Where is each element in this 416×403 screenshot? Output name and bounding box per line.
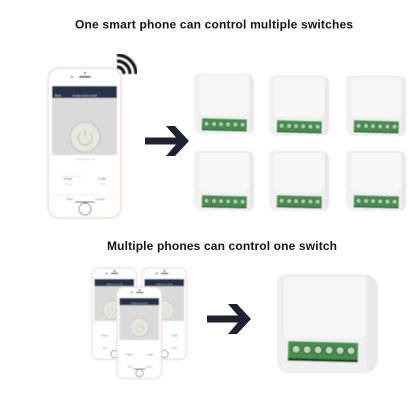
title: one phone: One smart phone can control multiple switches bbox=[75, 17, 353, 31]
phone: right: bridge smart socket bbox=[157, 283, 173, 286]
phone: center: Back bbox=[128, 367, 134, 369]
arrow: top bbox=[145, 126, 189, 156]
phones: three smartphones bbox=[92, 268, 187, 378]
phone: main smartphone: Back bbox=[67, 197, 74, 201]
phone: center: Confirm bbox=[145, 366, 153, 369]
phone: center: 0 min bbox=[147, 353, 154, 356]
phone: right: Confirm bbox=[170, 347, 178, 350]
phone: center bbox=[117, 287, 162, 378]
phone: main smartphone: Confirm bbox=[95, 197, 106, 201]
phone: main smartphone: 0 hour bbox=[63, 177, 73, 181]
phone: right bbox=[142, 268, 187, 360]
switch: large single bbox=[277, 274, 378, 373]
phone: main smartphone bbox=[48, 68, 121, 218]
phone: center: 0 hour bbox=[126, 353, 133, 356]
phone: left: bridge smart socket bbox=[107, 283, 123, 286]
icon: wifi signal bbox=[117, 55, 136, 74]
phone: main smartphone: Back bbox=[55, 93, 62, 97]
phone: left bbox=[92, 268, 137, 360]
phone: main smartphone: 0 min bbox=[98, 177, 106, 181]
phone: main smartphone: bridge smart socket bbox=[73, 93, 97, 97]
phone: main smartphone: Countdown: off bbox=[76, 157, 95, 161]
arrow: bottom bbox=[207, 304, 251, 334]
phone: main smartphone: 1 hour bbox=[64, 182, 72, 186]
phone: main smartphone: 1 min bbox=[99, 182, 106, 186]
phone: left: 0 hour bbox=[101, 334, 108, 337]
phone: right: 0 min bbox=[172, 334, 179, 337]
grid: six switches bbox=[194, 74, 406, 211]
phone: left: Back bbox=[103, 348, 109, 350]
phone: center: bridge smart socket bbox=[132, 302, 148, 305]
title: multiple phones: Multiple phones can control one switch bbox=[107, 239, 337, 253]
